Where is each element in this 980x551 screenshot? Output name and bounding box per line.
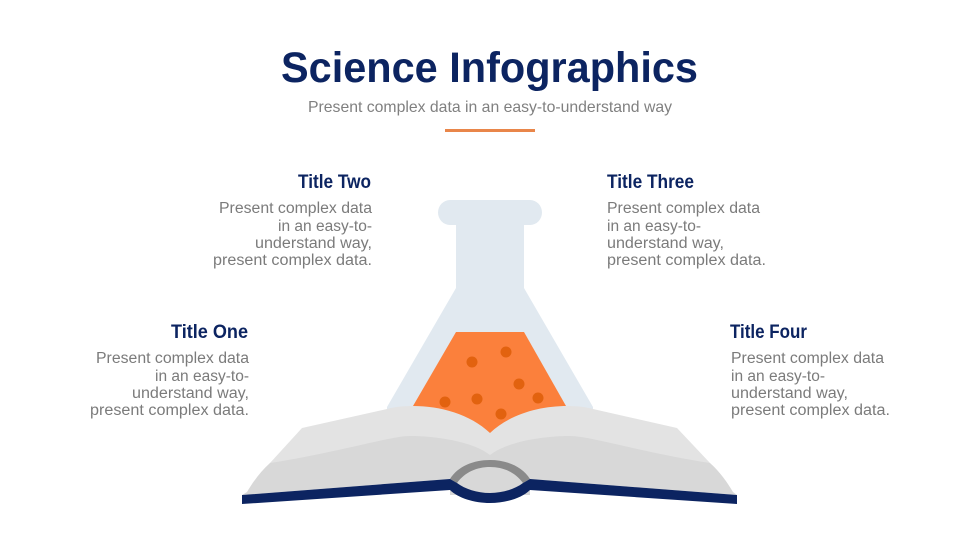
body: Present complex data xyxy=(731,350,884,367)
flask liquid xyxy=(413,332,566,436)
flask body xyxy=(387,200,593,430)
heading: Title One xyxy=(171,322,248,343)
body: in an easy-to- xyxy=(155,368,249,385)
subtitle: Present complex data in an easy-to-understand way xyxy=(308,99,672,116)
body xyxy=(90,350,249,419)
accent underline xyxy=(445,129,535,132)
lower pages xyxy=(242,436,737,495)
flask illustration xyxy=(387,200,593,436)
body xyxy=(213,200,372,269)
liquid bubbles xyxy=(440,346,544,420)
body: in an easy-to- xyxy=(278,218,372,235)
body xyxy=(731,350,890,419)
text block: title one xyxy=(90,322,249,419)
heading: Title Two xyxy=(298,172,371,193)
heading: Title Three xyxy=(607,172,694,193)
text block: title four xyxy=(730,322,890,419)
body: present complex data. xyxy=(90,402,249,419)
body: Present complex data xyxy=(219,200,372,217)
body: in an easy-to- xyxy=(731,368,825,385)
body: understand way, xyxy=(607,235,724,252)
body xyxy=(607,200,766,269)
navy book cover xyxy=(242,479,737,504)
spine ring xyxy=(450,460,530,483)
open book xyxy=(242,406,737,504)
body: present complex data. xyxy=(607,252,766,269)
body: present complex data. xyxy=(731,402,890,419)
body: Present complex data xyxy=(607,200,760,217)
text block: title two xyxy=(213,172,372,269)
upper pages xyxy=(270,406,710,480)
body: present complex data. xyxy=(213,252,372,269)
body: Present complex data xyxy=(96,350,249,367)
heading: Title Four xyxy=(730,322,808,343)
body: understand way, xyxy=(132,385,249,402)
body: understand way, xyxy=(255,235,372,252)
body: in an easy-to- xyxy=(607,218,701,235)
title: Science Infographics xyxy=(281,44,698,92)
text block: title three xyxy=(607,172,766,269)
body: understand way, xyxy=(731,385,848,402)
